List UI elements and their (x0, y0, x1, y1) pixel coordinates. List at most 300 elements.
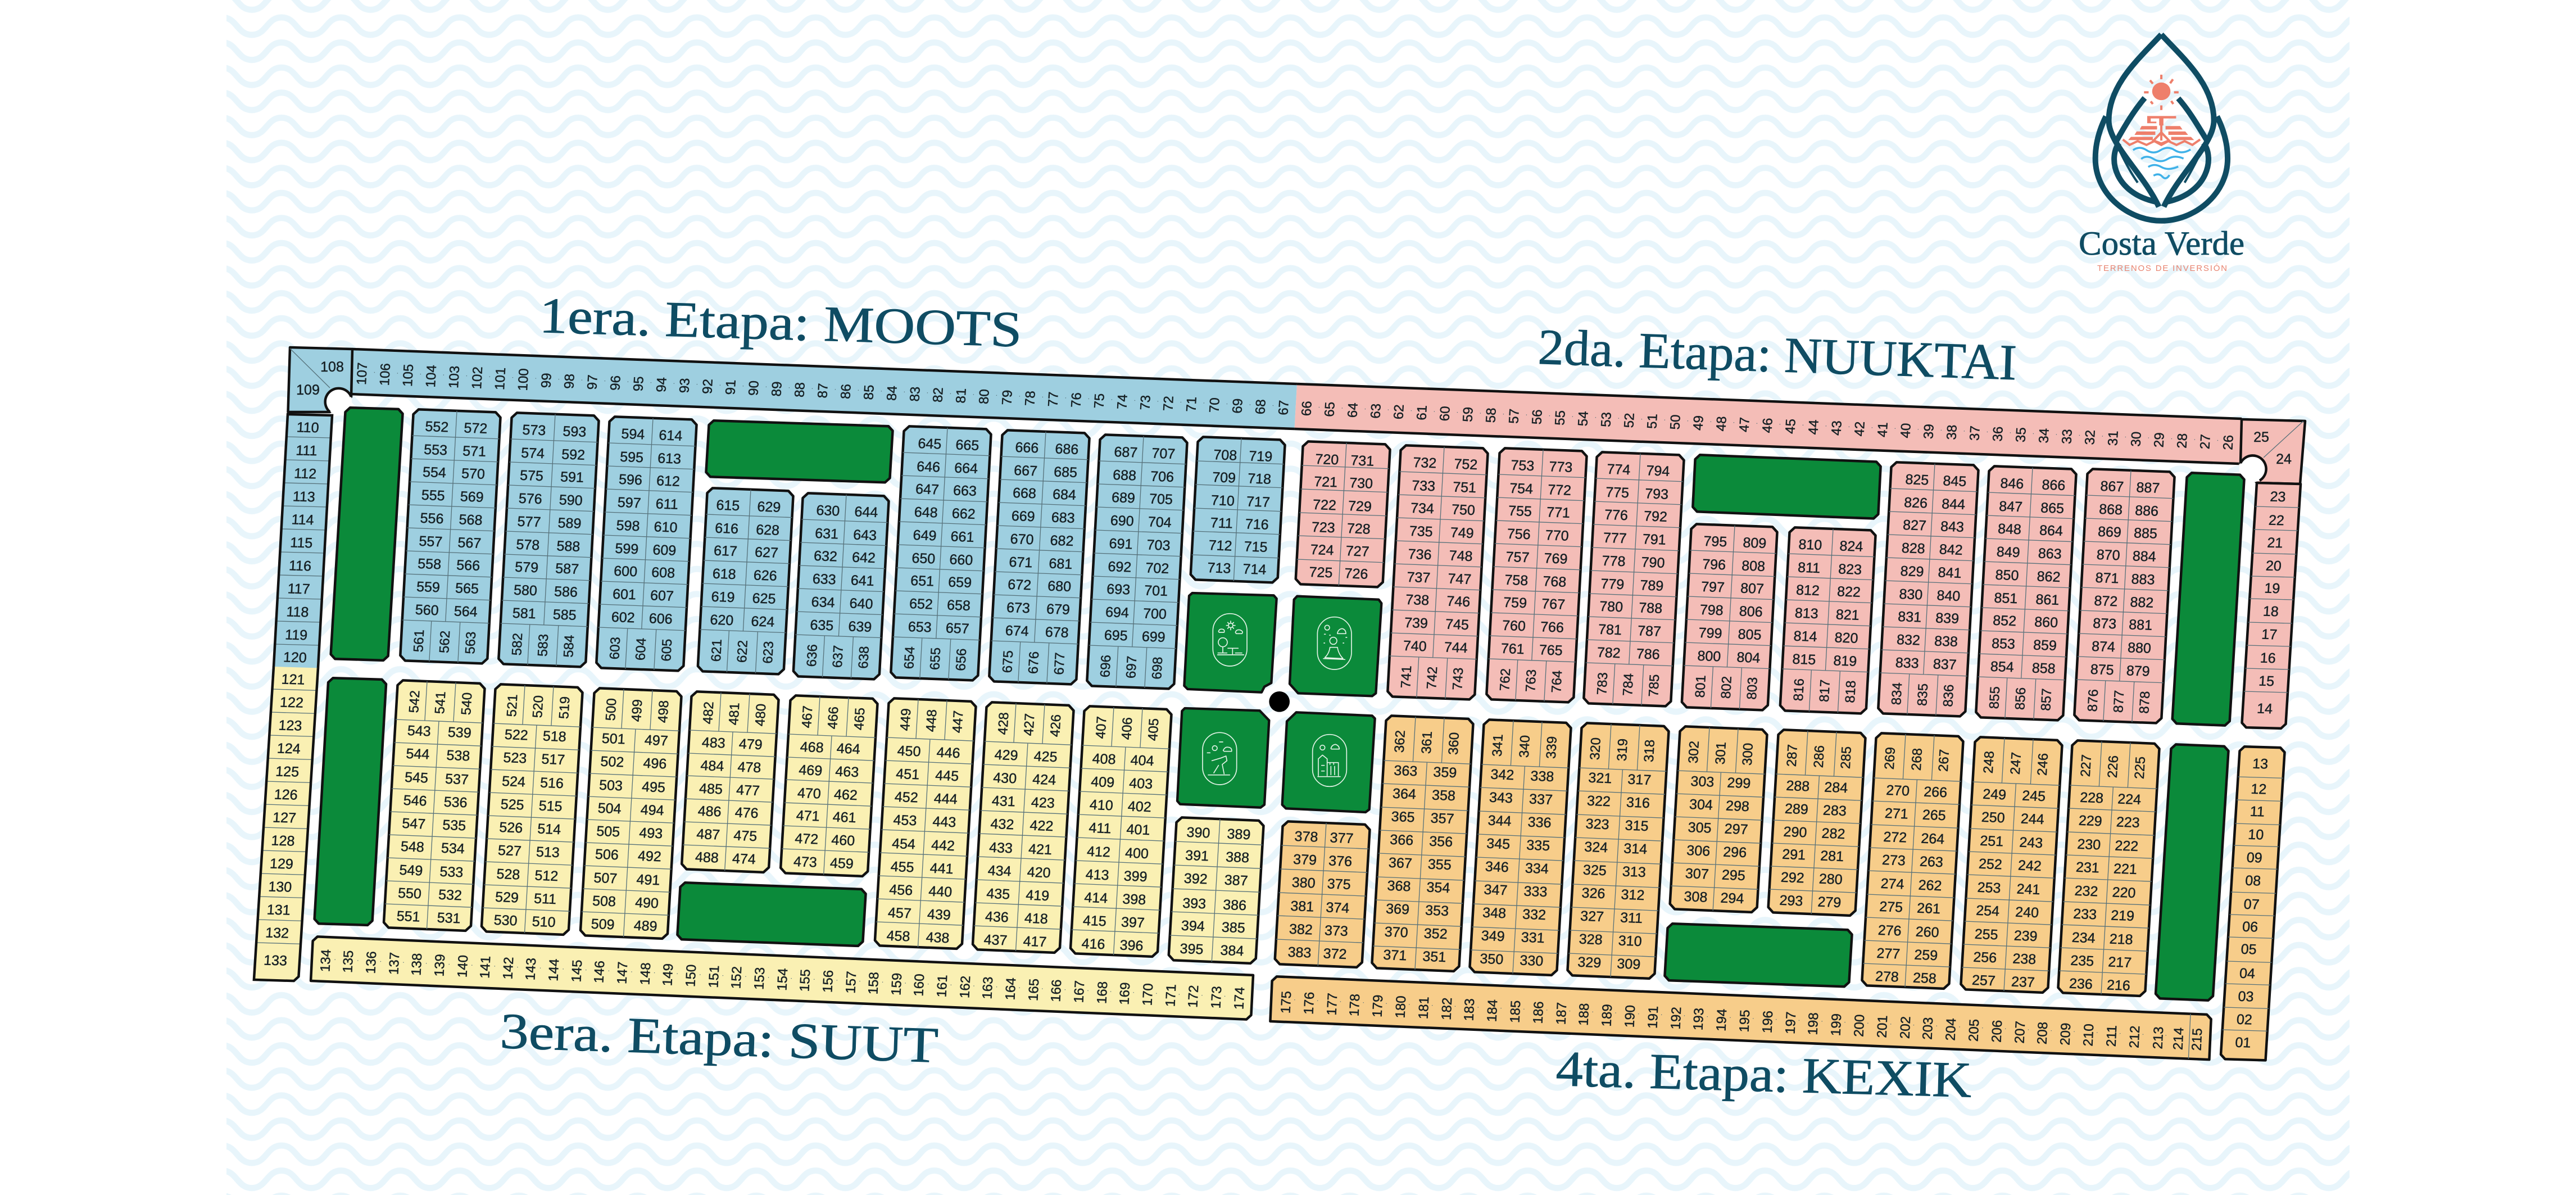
lot block 258-278: 278 (1875, 968, 1899, 985)
lot block 552-572: 562 (437, 630, 453, 653)
lot block 867-887: 885 (2133, 525, 2158, 542)
lot block 753-773: 760 (1502, 618, 1526, 634)
lot column 01-13: 09 (2246, 850, 2263, 866)
lot block 795-809: 799 (1698, 625, 1722, 641)
lot strip 26-66: 34 (2036, 428, 2052, 443)
lot block 489-509: 508 (592, 893, 616, 909)
lot block 417-437: 422 (1030, 818, 1054, 834)
lot block 732-752 (1387, 445, 1488, 700)
lot block 216-236: 219 (2110, 907, 2135, 924)
lot block 489-509: 506 (595, 847, 619, 863)
lot block 459-473: 468 (800, 739, 824, 756)
lot block 372-383: 381 (1290, 898, 1314, 915)
lot block 384-395: 385 (1221, 920, 1246, 936)
lot block 774-794: 778 (1602, 553, 1626, 569)
lot block 774-794: 786 (1636, 646, 1660, 663)
lot strip 26-66: 53 (1598, 412, 1614, 427)
lot block 216-236: 233 (2072, 906, 2097, 922)
lot block 753-773: 771 (1546, 504, 1571, 521)
lot block 573-593: 591 (560, 469, 584, 486)
lot block 732-752: 746 (1446, 594, 1471, 610)
lot column 110-120: 110 (296, 419, 319, 436)
lot block 687-707 (1087, 434, 1187, 689)
lot block 732-752: 738 (1405, 592, 1430, 608)
lot strip 134-174: 135 (340, 950, 356, 973)
lot block 417-437: 423 (1031, 795, 1055, 811)
lot block 474-488: 487 (696, 826, 720, 843)
lot block 645-665: 649 (913, 527, 937, 544)
lot block 753-773: 766 (1540, 619, 1564, 636)
lot strip 67-107: 68 (1253, 399, 1269, 415)
lot block 510-530 (481, 684, 583, 935)
lot strip 67-107: 92 (700, 379, 716, 394)
lot block 645-665: 648 (914, 504, 938, 521)
lot block 279-293: 289 (1784, 801, 1809, 817)
lot block 753-773 (1486, 448, 1587, 703)
lot column 14-23: 19 (2264, 581, 2280, 596)
lot block 531-551: 534 (441, 840, 465, 857)
roundabout (1269, 691, 1290, 712)
lot block 846-866: 859 (2033, 637, 2057, 654)
lot block 459-473: 464 (836, 741, 860, 757)
lot block 330-350: 349 (1481, 928, 1505, 944)
lot block 258-278 (1862, 733, 1963, 989)
lot block 594-614: 600 (614, 563, 638, 580)
lot block 645-665: 658 (946, 597, 971, 614)
lot block 384-395: 387 (1224, 872, 1248, 889)
lot block 732-752: 741 (1398, 666, 1414, 689)
panel: green areas (314, 408, 2244, 1001)
lot block 666-686: 668 (1012, 485, 1037, 501)
lot block 732-752: 748 (1449, 548, 1473, 564)
lot block 615-629: 625 (752, 590, 776, 607)
lot block 867-887 (2074, 469, 2175, 723)
lot strip 26-66: 65 (1322, 401, 1338, 417)
lot strip 67-107: 101 (492, 367, 509, 390)
lot block 474-488: 474 (732, 851, 756, 867)
lot block 417-437: 431 (991, 793, 1016, 809)
lot block 216-236: 235 (2070, 953, 2094, 969)
lot block 753-773: 768 (1543, 573, 1567, 590)
lot block 753-773: 764 (1549, 670, 1565, 693)
lot block 795-809: 803 (1744, 677, 1761, 700)
lot block 552-572 (400, 409, 501, 664)
lot block 459-473: 465 (851, 707, 868, 731)
lot block 630-644: 644 (854, 504, 878, 520)
lot strip 67-107: 70 (1207, 397, 1223, 413)
lot block 489-509: 499 (629, 699, 645, 722)
lot block 474-488: 478 (737, 759, 761, 776)
lot block 846-866: 848 (1997, 521, 2022, 537)
lot block 867-887: 867 (2100, 478, 2124, 495)
lot block 237-257: 237 (2011, 974, 2035, 990)
lot block 417-437: 426 (1047, 714, 1064, 737)
lot strip 67-107: 79 (999, 390, 1015, 405)
lot strip 67-107: 67 (1276, 400, 1292, 415)
lot column 121-133: 124 (276, 740, 301, 757)
lot block 867-887: 877 (2111, 690, 2127, 713)
lot block 510-530: 514 (537, 821, 561, 838)
lot column 110-120: 120 (283, 649, 307, 666)
lot block 531-551: 536 (443, 794, 468, 811)
lot block 510-530: 529 (495, 889, 519, 906)
lot block 732-752: 737 (1407, 569, 1431, 586)
lot block 666-686: 680 (1047, 578, 1072, 595)
lot block 294-308: 296 (1723, 844, 1747, 861)
lot block 708-719: 715 (1244, 538, 1268, 555)
lot block 732-752: 752 (1454, 456, 1478, 473)
lot strip 175-215: 210 (2081, 1024, 2097, 1047)
lot block 630-644: 633 (812, 571, 836, 587)
lot block 687-707: 705 (1149, 491, 1173, 508)
lot block 615-629: 617 (713, 543, 738, 559)
lot block 645-665: 652 (909, 596, 933, 613)
lot strip 26-66: 33 (2059, 429, 2075, 445)
lot block 645-665: 656 (953, 648, 969, 671)
lot block 237-257: 255 (1974, 926, 1998, 943)
lot block 666-686: 667 (1014, 463, 1038, 479)
lot block 645-665: 660 (949, 551, 973, 568)
lot block 237-257: 254 (1975, 903, 2000, 919)
lot block 372-383: 372 (1323, 945, 1347, 962)
lot block 237-257: 256 (1973, 949, 1997, 966)
lot block 438-458: 439 (927, 907, 951, 923)
lot block 552-572: 553 (424, 442, 448, 458)
lot block 552-572: 570 (461, 465, 486, 482)
lot block 258-278: 268 (1909, 748, 1925, 771)
lot block 531-551 (383, 680, 485, 931)
lot block 594-614: 599 (615, 541, 639, 557)
park NW with picnic icon (1184, 593, 1277, 692)
lot block 309-329: 325 (1582, 862, 1607, 879)
lot block 237-257: 238 (2012, 951, 2037, 967)
lot block 795-809: 806 (1739, 603, 1763, 620)
lot block 774-794: 794 (1646, 463, 1670, 479)
lot strip 67-107: 85 (861, 384, 877, 400)
lot column 121-133: 123 (278, 717, 302, 734)
lot block 708-719: 708 (1213, 447, 1237, 464)
lot strip 67-107: 107 (354, 362, 370, 385)
lot strip 175-215: 191 (1645, 1006, 1661, 1029)
lot block 474-488: 485 (699, 781, 723, 798)
lot block 615-629: 622 (734, 640, 751, 663)
lot strip 175-215: 203 (1920, 1017, 1936, 1040)
lot block 294-308: 303 (1690, 773, 1715, 790)
lot block 294-308: 300 (1740, 743, 1756, 766)
lot column 01-13: 04 (2239, 966, 2256, 982)
site map (254, 347, 2305, 1060)
lot block 237-257: 240 (2015, 904, 2039, 921)
lot block 867-887: 887 (2136, 479, 2160, 496)
lot block 810-824: 811 (1797, 560, 1821, 576)
lot block 867-887: 871 (2095, 570, 2119, 586)
lot strip 134-174: 145 (569, 959, 585, 983)
lot strip 67-107: 77 (1045, 391, 1062, 407)
lot block 825-845: 841 (1938, 564, 1962, 581)
lot strip 26-66: 39 (1921, 424, 1937, 439)
lot block 630-644: 641 (850, 572, 874, 589)
lot strip 67-107: 89 (769, 381, 785, 397)
lot block 825-845: 828 (1901, 540, 1925, 557)
lot column 01-13: 12 (2251, 781, 2267, 798)
lot block 438-458 (874, 698, 976, 949)
lot block 594-614: 614 (659, 427, 683, 444)
lot block 666-686: 671 (1009, 554, 1033, 571)
lot block 774-794: 793 (1645, 486, 1669, 503)
lot strip 134-174: 147 (614, 961, 631, 984)
lot block 351-371: 367 (1388, 855, 1413, 871)
lot block 474-488 (682, 691, 779, 872)
lot block 774-794: 779 (1600, 576, 1625, 592)
lot block 552-572: 565 (455, 580, 479, 597)
lot strip 175-215: 196 (1760, 1010, 1776, 1034)
lot strip 175-215: 188 (1576, 1003, 1592, 1026)
lot strip 26-66: 66 (1299, 401, 1315, 417)
lot strip 134-174: 171 (1163, 984, 1179, 1007)
lot block 552-572: 552 (425, 419, 449, 435)
lot block 351-371: 366 (1390, 832, 1414, 848)
lot block 810-824: 818 (1843, 680, 1859, 703)
lot block 438-458: 447 (950, 710, 966, 734)
lot block 474-488: 479 (738, 736, 763, 753)
lot block 615-629: 618 (712, 566, 736, 582)
lot strip 26-66: 52 (1621, 413, 1638, 428)
lot block 753-773: 756 (1507, 526, 1531, 542)
lot block 396-416 (1070, 706, 1172, 957)
green area right upper (2172, 473, 2244, 726)
lot column 14-23: 20 (2265, 558, 2282, 574)
lot block 720-731: 724 (1310, 542, 1334, 558)
lot block 795-809: 798 (1699, 602, 1724, 618)
lot block 732-752: 743 (1450, 667, 1466, 690)
lot block 666-686: 685 (1054, 464, 1078, 481)
lot block 474-488: 486 (697, 803, 722, 820)
lot strip 26-66: 54 (1575, 411, 1591, 427)
lot block 279-293: 282 (1821, 826, 1845, 842)
lot block 867-887: 869 (2097, 524, 2122, 540)
lot block 489-509: 498 (655, 700, 672, 723)
lot block 489-509: 493 (639, 825, 663, 841)
lot block 438-458: 458 (886, 928, 910, 944)
lot strip 26-66: 35 (2013, 427, 2029, 442)
lot block 594-614: 606 (648, 610, 673, 627)
lot block 510-530: 511 (533, 891, 557, 907)
park SE with castle icon (1282, 712, 1375, 812)
lot column 121-133: 127 (272, 809, 297, 826)
lot strip 175-215: 180 (1393, 995, 1409, 1019)
lot block 531-551: 537 (445, 771, 469, 787)
lot block 510-530: 525 (500, 796, 524, 813)
lot column 14-23: 16 (2260, 650, 2276, 666)
lot block 489-509: 494 (640, 802, 664, 818)
heading: etapa 4: 4ta. Etapa: KEXIK (1555, 1041, 1972, 1108)
lot block 309-329: 316 (1626, 795, 1650, 811)
lot strip 134-174: 143 (523, 957, 539, 981)
lot strip 26-66: 31 (2105, 431, 2121, 446)
lot block 666-686: 677 (1051, 652, 1068, 675)
lot block 459-473: 462 (833, 787, 858, 803)
lot block 531-551: 549 (399, 862, 423, 879)
lot block 825-845: 830 (1899, 586, 1923, 603)
park SW with stargazing icon (1177, 708, 1269, 808)
lot block 846-866: 857 (2038, 688, 2055, 711)
lot strip 175-215: 175 (1278, 991, 1294, 1014)
lot block 795-809: 795 (1703, 533, 1727, 550)
lot block 732-752: 740 (1403, 638, 1427, 654)
lot block 552-572: 567 (457, 535, 482, 551)
lot block 351-371: 353 (1425, 903, 1449, 919)
lot strip 26-66: 36 (1990, 426, 2006, 442)
lot block 309-329: 327 (1580, 908, 1604, 925)
lot block 753-773: 772 (1548, 482, 1572, 499)
lot block 438-458: 441 (929, 861, 954, 877)
lot block 795-809 (1681, 524, 1777, 710)
lot block 774-794: 791 (1642, 531, 1666, 548)
lot block 825-845: 826 (1904, 495, 1928, 512)
lot strip 175-215: 195 (1737, 1010, 1753, 1033)
lot block 615-629: 627 (754, 544, 779, 561)
lot strip 134-174: 164 (1003, 977, 1019, 1001)
lot block 666-686: 676 (1026, 651, 1042, 674)
lot strip 26-66: 29 (2151, 432, 2167, 448)
lot block 384-395: 390 (1186, 825, 1210, 841)
lot block 279-293: 293 (1779, 893, 1803, 909)
lot column 121-133: 130 (268, 879, 292, 895)
lot block 825-845: 833 (1895, 655, 1919, 672)
lot block 417-437: 418 (1024, 911, 1049, 927)
lot block 438-458: 455 (890, 859, 914, 875)
lot block 573-593: 576 (518, 491, 542, 507)
lot block 330-350: 343 (1489, 790, 1513, 806)
lot block 531-551: 539 (447, 725, 471, 741)
lot block 687-707: 691 (1109, 536, 1133, 553)
lot block 279-293: 286 (1811, 745, 1827, 768)
lot block 258-278: 260 (1915, 924, 1939, 940)
lot block 417-437: 429 (994, 747, 1018, 763)
lot block 351-371: 365 (1391, 809, 1415, 825)
lot block 810-824: 816 (1791, 678, 1807, 701)
lot block 825-845: 844 (1942, 496, 1966, 513)
lot block 846-866: 849 (1996, 544, 2020, 560)
lot strip 67-107: 74 (1114, 394, 1131, 410)
lot block 645-665: 654 (901, 646, 918, 669)
lot block 552-572: 560 (415, 602, 439, 618)
lot block 237-257: 246 (2035, 753, 2051, 776)
lot block 330-350: 345 (1486, 836, 1511, 852)
lot block 810-824: 810 (1798, 537, 1822, 553)
lot block 594-614: 604 (633, 637, 649, 660)
lot block 417-437: 427 (1021, 713, 1037, 736)
lot block 687-707: 703 (1146, 537, 1171, 554)
lot block 795-809: 808 (1741, 558, 1766, 574)
lot strip 175-215: 208 (2035, 1021, 2051, 1045)
lot column 110-120: 118 (286, 604, 309, 620)
lot block 867-887: 878 (2137, 691, 2153, 714)
lot block 795-809: 809 (1743, 535, 1767, 551)
lot block 489-509: 500 (603, 698, 619, 721)
lot column 110-120: 111 (296, 442, 318, 459)
lot block 489-509: 489 (633, 918, 657, 934)
lot block 720-731: 725 (1309, 564, 1333, 581)
green area blue middle (706, 420, 893, 482)
lot block 774-794: 790 (1641, 554, 1665, 571)
lot column 14-23 (2242, 483, 2301, 728)
lot block 438-458: 438 (926, 930, 950, 946)
lot block 309-329: 309 (1617, 956, 1641, 972)
lot column 121-133: 122 (279, 694, 304, 711)
lot block 459-473: 463 (835, 764, 859, 780)
lot block 417-437: 419 (1026, 888, 1050, 904)
lot strip 134-174: 146 (591, 961, 607, 984)
lot block 309-329: 326 (1581, 885, 1606, 902)
lot strip 175-215: 185 (1508, 1000, 1523, 1023)
lot column 121-133: 125 (275, 763, 300, 780)
lot block 846-866: 866 (2042, 477, 2066, 494)
lot strip 134-174: 158 (865, 972, 882, 995)
lot block 216-236: 223 (2116, 814, 2140, 831)
lot block 615-629: 629 (757, 499, 781, 515)
lot block 510-530: 513 (536, 844, 560, 861)
lot block 573-593: 590 (559, 492, 583, 509)
lot block 774-794: 792 (1643, 508, 1668, 525)
lot block 396-416: 410 (1089, 797, 1114, 813)
lot strip 67-107: 106 (377, 363, 393, 386)
lot block 384-395: 388 (1225, 849, 1250, 866)
lot block 258-278: 266 (1923, 784, 1948, 800)
lot strip 134-174: 170 (1140, 983, 1156, 1006)
lot block 237-257: 241 (2016, 881, 2040, 898)
lot block 552-572: 559 (416, 579, 441, 595)
lot strip 26-66 (1295, 384, 2242, 464)
lot block 753-773: 758 (1504, 572, 1529, 589)
lot block 552-572: 564 (453, 603, 478, 620)
lot block 531-551: 535 (442, 817, 466, 834)
lot block 438-458: 453 (893, 812, 917, 829)
lot column 121-133: 128 (271, 832, 295, 849)
lot block 687-707: 699 (1141, 628, 1165, 645)
lot strip 26-66: 57 (1506, 409, 1522, 424)
lot block 573-593: 581 (512, 605, 536, 622)
lot block 510-530: 526 (499, 820, 523, 836)
lot block 474-488: 488 (695, 849, 719, 866)
lot block 309-329: 315 (1625, 818, 1649, 834)
lot strip 26-66: 61 (1414, 405, 1430, 420)
lot block 687-707: 695 (1104, 627, 1128, 644)
lot block 489-509: 495 (641, 779, 666, 795)
lot block 417-437: 433 (988, 840, 1013, 856)
lot block 396-416: 401 (1126, 822, 1150, 838)
lot block 330-350: 331 (1521, 930, 1545, 946)
lot block 594-614: 608 (651, 564, 675, 581)
lot block 237-257: 239 (2013, 928, 2038, 944)
lot block 615-629: 615 (716, 497, 740, 514)
icon: drop, leaves, sun, temple and water (2096, 34, 2228, 221)
lot strip 67-107: 83 (907, 386, 923, 402)
lot strip 67-107: 82 (930, 387, 946, 402)
lot block 594-614: 594 (621, 426, 645, 442)
lot block 258-278: 267 (1936, 749, 1952, 772)
lot block 531-551: 551 (396, 908, 420, 925)
lot block 489-509: 505 (596, 823, 620, 840)
lot block 732-752: 739 (1404, 615, 1428, 631)
lot block 630-644: 634 (811, 594, 835, 610)
lot strip 175-215: 181 (1416, 997, 1432, 1020)
lot block 510-530: 516 (539, 775, 564, 791)
lot block 372-383: 379 (1292, 852, 1317, 868)
lot column 14-23: 14 (2256, 701, 2273, 717)
lot block 753-773: 761 (1500, 641, 1525, 657)
lot block 825-845: 834 (1889, 682, 1905, 705)
